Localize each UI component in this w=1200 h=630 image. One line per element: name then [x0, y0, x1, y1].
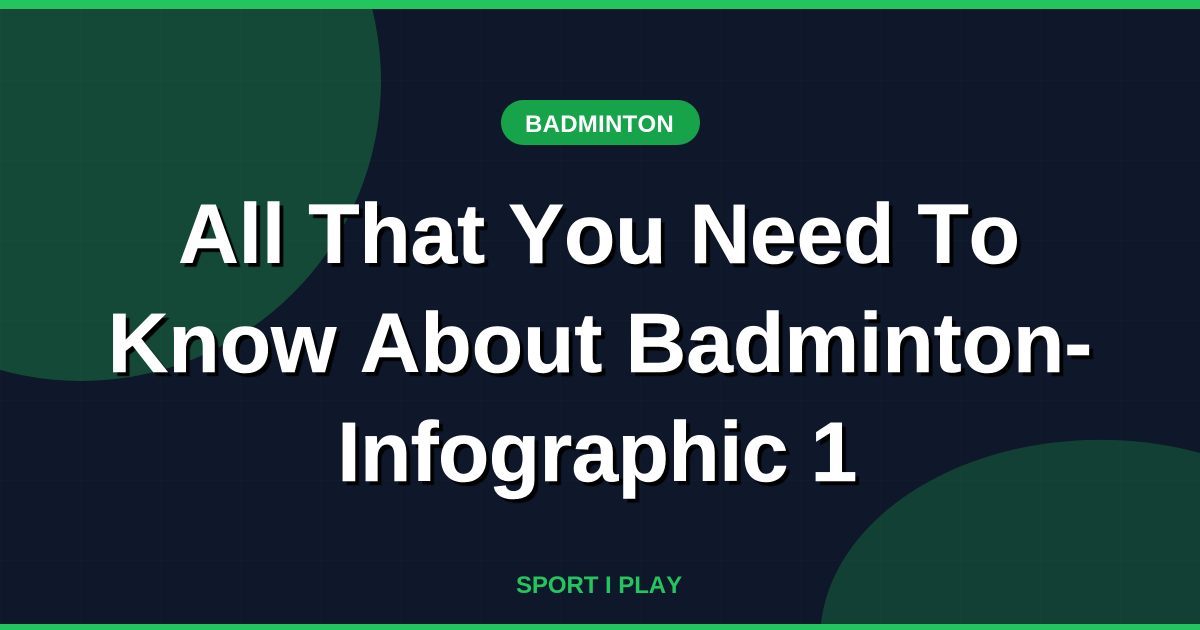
category pill: badminton: BADMINTON	[525, 111, 674, 138]
title: All That You Need To	[178, 187, 1020, 281]
top accent bar	[0, 0, 1200, 9]
title	[108, 187, 1094, 504]
brand name: SPORT I PLAY	[516, 572, 682, 599]
category pill: badminton	[501, 100, 700, 145]
background circle: top left	[0, 0, 381, 381]
title: Infographic 1	[337, 405, 857, 499]
bottom accent bar	[0, 624, 1200, 630]
title: Know About Badminton-	[108, 296, 1092, 390]
background ellipse: bottom right	[820, 440, 1200, 630]
